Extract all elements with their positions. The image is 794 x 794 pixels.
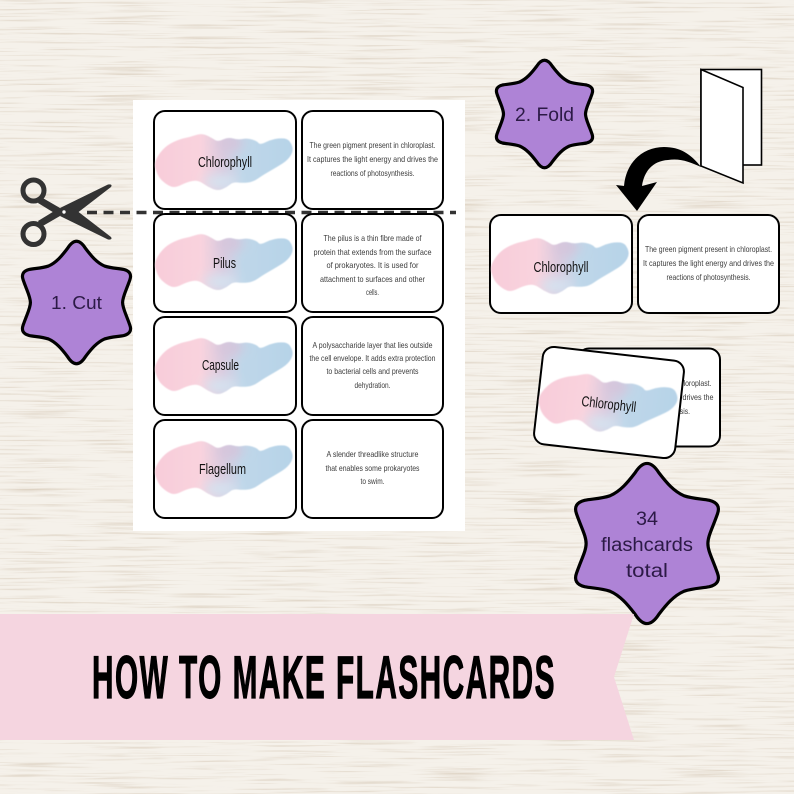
- badge: 2. Fold: [496, 60, 593, 168]
- card row: Flagellum: Flagellum: [199, 462, 246, 478]
- panel: printable flashcard sheet: [133, 100, 465, 531]
- tilted front flashcard: Chlorophyll: [580, 394, 637, 416]
- card row: Capsule: dehydration.: [354, 380, 390, 390]
- icon: folded paper: [701, 70, 762, 183]
- badge: 34 flashcards total: [576, 463, 718, 624]
- folded flashcard pair: reactions of photosynthesis.: [666, 272, 750, 282]
- back flashcard: [578, 348, 720, 446]
- arrow: fold to card: [616, 147, 701, 211]
- badge: 2. Fold: 2. Fold: [515, 105, 574, 126]
- icon: scissors: [23, 180, 112, 244]
- back flashcard: The green pigment present in chloroplast.: [584, 378, 712, 388]
- badge: 34 flashcards total: total: [626, 561, 668, 582]
- card row: Chlorophyll: reactions of photosynthesis.: [330, 168, 414, 178]
- card row: Pilus: [153, 214, 443, 312]
- card row: Flagellum: that enables some prokaryotes: [326, 463, 420, 473]
- tilted front flashcard: [532, 346, 686, 459]
- card row: Capsule: to bacterial cells and prevents: [326, 366, 418, 376]
- banner ribbon: [0, 614, 634, 740]
- card row: Capsule: [153, 317, 443, 415]
- card row: Pilus: Pilus: [213, 256, 236, 272]
- card row: Pilus: The pilus is a thin fibre made of: [324, 233, 422, 243]
- card row: Capsule: the cell envelope. It adds extra protection: [310, 353, 436, 363]
- card row: Flagellum: to swim.: [360, 476, 384, 486]
- badge: 1. Cut: [22, 241, 131, 364]
- card row: Capsule: A polysaccharide layer that lies outside: [312, 340, 433, 350]
- back flashcard: It captures the light energy and drives the: [582, 392, 714, 402]
- folded flashcard pair: It captures the light energy and drives the: [643, 258, 774, 268]
- card row: Chlorophyll: It captures the light energy and drives the: [307, 154, 438, 164]
- card row: Chlorophyll: Chlorophyll: [198, 155, 252, 171]
- card row: Pilus: cells.: [366, 287, 379, 297]
- badge: 1. Cut: 1. Cut: [51, 293, 102, 313]
- card row: Capsule: Capsule: [202, 358, 239, 374]
- card row: Flagellum: A slender threadlike structure: [326, 449, 419, 459]
- card row: Chlorophyll: [153, 111, 443, 209]
- card row: Pilus: protein that extends from the surface: [314, 247, 432, 257]
- badge: 34 flashcards total: flashcards: [601, 535, 693, 556]
- cut line: [87, 211, 456, 214]
- card row: Flagellum: [153, 420, 443, 518]
- card row: Chlorophyll: The green pigment present in chloroplast.: [310, 140, 436, 150]
- card row: Pilus: attachment to surfaces and other: [320, 274, 425, 284]
- card row: Pilus: of prokaryotes. It is used for: [326, 260, 419, 270]
- back flashcard: reactions of photosynthesis.: [606, 406, 690, 416]
- folded flashcard pair: [489, 215, 779, 313]
- badge: 34 flashcards total: 34: [636, 509, 658, 530]
- folded flashcard pair: Chlorophyll: [534, 260, 588, 276]
